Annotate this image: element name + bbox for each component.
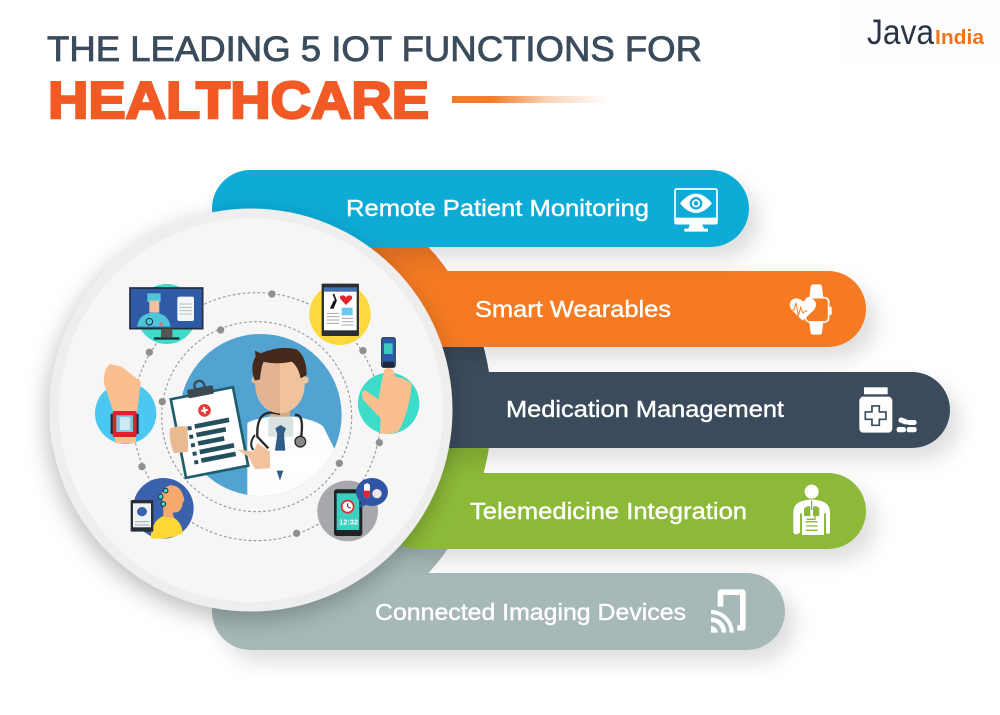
icon: finger pulse oximeter [358,338,419,434]
title accent line [452,96,610,103]
icon: medication reminder phone: 12:32 [339,517,358,526]
logo: India [935,27,985,49]
panel: central circle [50,208,452,612]
dashed orbit rings [133,293,381,541]
title line two: healthcare: HEALTHCARE [48,72,429,130]
illustration: doctor and IoT icons [95,284,419,541]
connector bands behind the circle [370,247,489,573]
panel: remote patient monitoring [212,170,749,247]
icon: brain scan [131,478,194,539]
icon: eye on monitor [675,189,717,232]
panel: smart wearables [380,271,866,347]
logo: Java [867,13,934,52]
icon: health tablet [309,284,371,345]
icon: medication reminder phone [317,478,388,541]
label: Telemedicine Integration [470,498,747,524]
label: Smart Wearables [475,296,671,322]
panel: medication management [380,372,950,448]
icon: telehealth monitor [130,284,203,344]
panel: connected imaging devices [212,573,785,650]
label: Medication Management [506,396,785,422]
title line one: THE LEADING 5 IOT FUNCTIONS FOR [47,30,702,69]
icon: medicine bottle [859,387,917,433]
icon: cast tablet [711,589,746,633]
panel: telemedicine integration [380,473,866,549]
icon: torso organs [793,485,830,535]
icon: smart watch with heart [789,284,832,335]
label: Remote Patient Monitoring [346,195,649,221]
doctor [168,334,342,500]
logo [843,0,1000,68]
clipboard [168,375,248,478]
hands [170,426,188,453]
title [47,30,702,130]
label: Connected Imaging Devices [375,599,686,625]
icon: wrist blood pressure monitor [95,364,156,444]
